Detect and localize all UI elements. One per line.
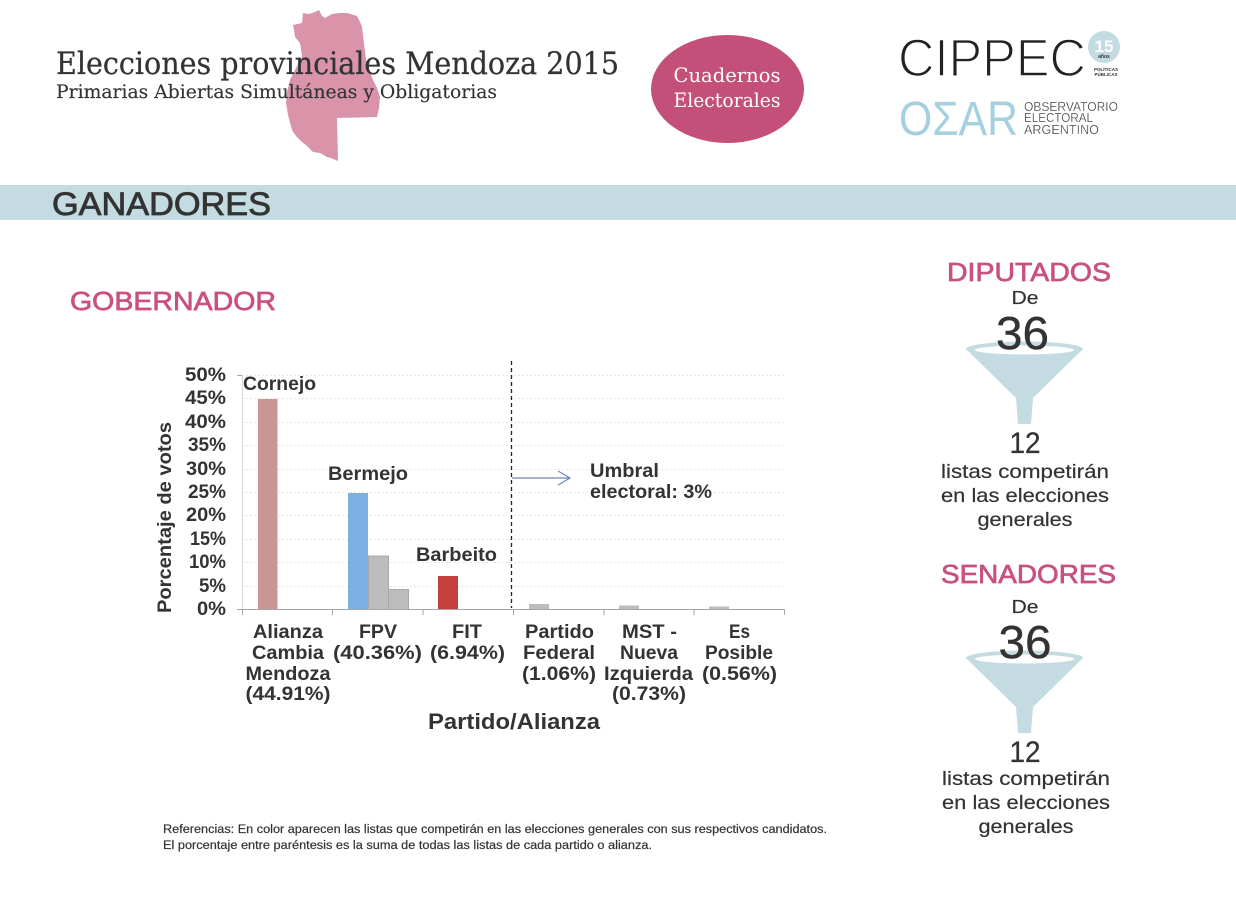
- logo: OEAR: ELECTORAL: [1024, 110, 1093, 125]
- logo: CIPPEC: POLÍTICAS: [1094, 65, 1118, 72]
- text: listas: [941, 461, 1109, 531]
- map of Mendoza: [286, 10, 380, 161]
- number: 12: 12: [1010, 427, 1040, 460]
- logo: OEAR: [899, 93, 1118, 146]
- candidate labels: Cornejo: [243, 374, 316, 395]
- title: Elecciones provinciales Mendoza 2015: [56, 46, 619, 82]
- logo: CIPPEC: CIPPEC: [898, 29, 1086, 88]
- category labels: FIT: [452, 622, 482, 643]
- y axis labels: 30%: [186, 459, 226, 480]
- x axis title: Partido/Alianza: [428, 709, 601, 734]
- logo: CIPPEC: años: [1098, 54, 1110, 60]
- text: listas: generales: [978, 509, 1073, 531]
- candidate labels: Barbeito: [416, 545, 497, 566]
- icon: funnel: [966, 342, 1083, 424]
- logo: CIPPEC: PÚBLICAS: [1094, 71, 1118, 77]
- text: listas: listas competirán: [942, 768, 1110, 790]
- number: 12: 12: [1010, 736, 1040, 769]
- threshold label: [590, 461, 712, 503]
- y axis labels: 20%: [186, 505, 226, 526]
- text: listas: en las elecciones: [941, 485, 1109, 507]
- text: listas: en las elecciones: [942, 792, 1110, 814]
- category labels: MST -: [622, 622, 677, 643]
- title: [56, 46, 619, 103]
- candidate labels: Bermejo: [328, 464, 408, 485]
- category labels: Mendoza: [246, 664, 331, 685]
- category labels: (40.36%): [333, 643, 422, 664]
- arrow: [512, 471, 570, 485]
- heading: SENADORES: SENADORES: [941, 559, 1116, 589]
- logo: OEAR: ARGENTINO: [1024, 122, 1099, 137]
- category labels: (0.56%): [702, 664, 777, 685]
- category labels: Izquierda: [604, 664, 693, 685]
- number: 36: 36: [998, 616, 1052, 668]
- threshold line: [510, 361, 512, 608]
- logo: OEAR: OΣAR: [899, 93, 1018, 146]
- logo: CIPPEC: 15: [1095, 37, 1113, 56]
- category labels: (0.73%): [612, 684, 686, 705]
- y axis labels: 50%: [185, 365, 226, 386]
- references note: [163, 824, 827, 852]
- category labels: (1.06%): [522, 664, 596, 685]
- section band: GANADORES: GANADORES: [52, 186, 271, 222]
- label: De: De: [1012, 288, 1038, 308]
- section band: GANADORES: [0, 185, 1236, 222]
- threshold label: electoral: 3%: [590, 482, 712, 503]
- category labels: Cambia: [252, 643, 324, 664]
- panel: diputados: [941, 257, 1111, 531]
- y axis title: Porcentaje de votos: [155, 422, 176, 613]
- category labels: FPV: [359, 622, 397, 643]
- references note: El porcentaje entre paréntesis es la suma de todas las listas de cada partido o alianza.: [163, 840, 652, 852]
- y axis labels: 15%: [190, 529, 226, 550]
- y axis labels: 25%: [188, 482, 226, 503]
- panel: senadores: [941, 559, 1116, 838]
- number: 36: 36: [996, 307, 1049, 359]
- y axis labels: 35%: [188, 435, 226, 456]
- heading: DIPUTADOS: DIPUTADOS: [947, 257, 1111, 287]
- badge: Cuadernos Electorales: Electorales: [674, 88, 780, 112]
- y axis labels: [185, 365, 226, 620]
- label: De: De: [1012, 597, 1038, 617]
- category labels: Partido: [525, 622, 594, 643]
- y axis labels: 0%: [197, 599, 226, 620]
- y axis labels: 5%: [199, 576, 226, 597]
- category labels: Es: [729, 622, 750, 643]
- bars: [258, 399, 729, 610]
- references note: Referencias: En color aparecen las listas que competirán en las elecciones generales con sus respectivos candidatos.: [163, 824, 827, 836]
- icon: funnel: [966, 650, 1083, 733]
- text: listas: [942, 768, 1110, 838]
- threshold label: Umbral: [590, 461, 659, 482]
- category labels: Nueva: [620, 643, 678, 664]
- badge: Cuadernos Electorales: [651, 35, 804, 143]
- category labels: (6.94%): [430, 643, 505, 664]
- y axis labels: 45%: [185, 388, 226, 409]
- axes: [237, 376, 784, 615]
- heading: GOBERNADOR: GOBERNADOR: [70, 286, 276, 316]
- candidate labels: [243, 374, 497, 566]
- y axis labels: 10%: [189, 552, 226, 573]
- badge: Cuadernos Electorales: Cuadernos: [674, 63, 780, 87]
- category labels: Posible: [705, 643, 773, 664]
- bar chart: votes per party: [155, 361, 784, 734]
- category labels: Alianza: [253, 622, 323, 643]
- category labels: (44.91%): [246, 684, 330, 705]
- y axis labels: 40%: [185, 412, 226, 433]
- logo: OEAR: OBSERVATORIO: [1024, 99, 1118, 114]
- category labels: Federal: [523, 643, 595, 664]
- text: listas: generales: [978, 816, 1074, 838]
- title: Primarias Abiertas Simultáneas y Obligatorias: [56, 81, 497, 103]
- category labels: [246, 622, 777, 705]
- text: listas: listas competirán: [941, 461, 1109, 483]
